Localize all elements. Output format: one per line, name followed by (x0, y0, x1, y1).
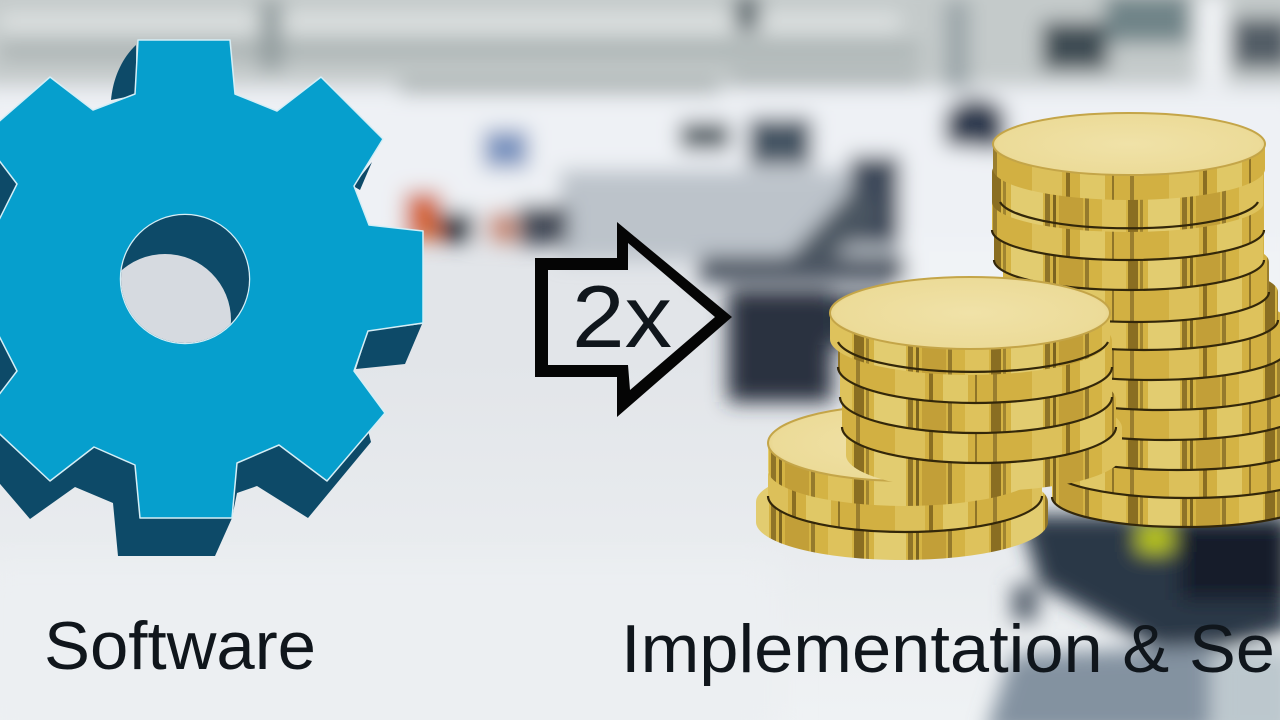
gear shadow: upper tooth (111, 45, 136, 100)
gear shadow: left patches (0, 155, 17, 228)
gear shadow: bottom extrusion (0, 400, 371, 556)
icon: coin stacks (756, 113, 1280, 560)
gear face (0, 40, 423, 518)
icon: gear (0, 40, 423, 556)
arrow with 2x (535, 222, 732, 417)
gear hole (121, 215, 249, 343)
label: implementation and service: Implementation & Se (621, 611, 1275, 687)
gear shadow: small right sliver (353, 162, 372, 190)
label: software: Software (44, 608, 316, 684)
gear shadow: right patch (356, 324, 422, 369)
arrow label: 2x (572, 267, 672, 366)
back coin stack (992, 113, 1280, 527)
front coin stack (830, 277, 1122, 491)
left coin stack (756, 405, 1048, 560)
